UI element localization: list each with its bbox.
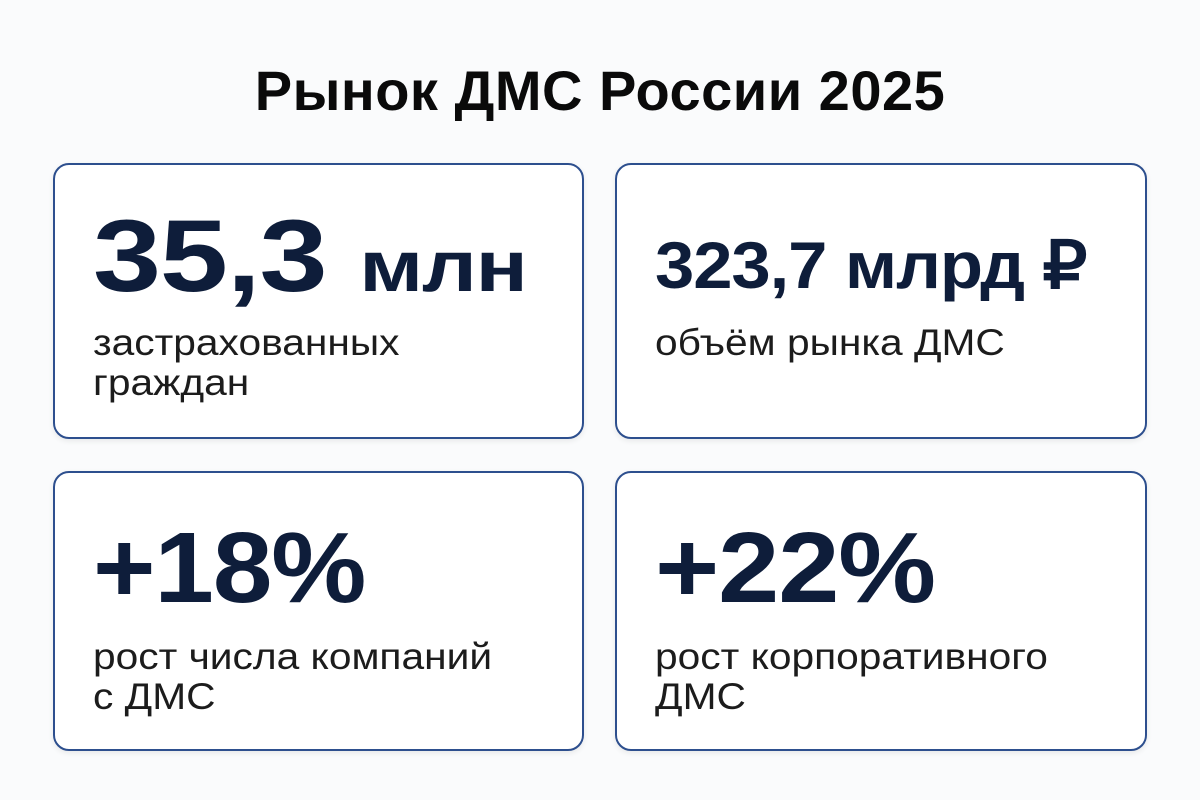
- label: рост корпоративного: [655, 636, 1048, 677]
- label: с ДМС: [93, 676, 216, 717]
- label: застрахованных: [93, 322, 399, 363]
- panel: companies growth: [53, 471, 584, 751]
- label: рост числа компаний: [93, 636, 492, 677]
- panel: market volume: [615, 163, 1147, 439]
- label: [655, 636, 1048, 717]
- big number: 35,3 млн: [93, 199, 527, 313]
- big number: +18%: [93, 512, 365, 624]
- panel: corporate growth: [615, 471, 1147, 751]
- big number: +22%: [655, 512, 935, 624]
- label: [93, 636, 492, 717]
- big number: 323,7 млрд ₽: [655, 228, 1086, 302]
- panel: insured citizens: [53, 163, 584, 439]
- label: граждан: [93, 362, 249, 403]
- label: [93, 322, 399, 403]
- label: ДМС: [655, 676, 746, 717]
- label: объём рынка ДМС: [655, 322, 1005, 363]
- title: Рынок ДМС России 2025: [255, 59, 945, 122]
